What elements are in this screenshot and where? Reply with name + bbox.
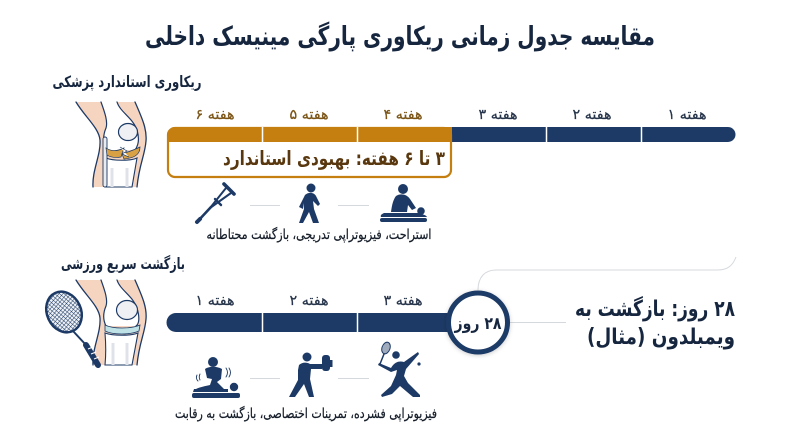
callout box: 3 to 6 weeks: ۳ تا ۶ هفته: بهبودی استاندارد	[223, 147, 445, 170]
illustration: knee with torn meniscus	[76, 102, 146, 187]
text: 28 days return to Wimbledon	[575, 295, 735, 350]
week labels: هفته ۶	[196, 107, 234, 123]
week labels: هفته ۳	[384, 293, 422, 309]
icon: specialised training	[289, 352, 332, 397]
icon: walking person	[299, 184, 320, 223]
week labels: هفته ۱	[196, 293, 234, 309]
week labels: هفته ۴	[384, 107, 422, 123]
icon: tennis racket	[40, 286, 99, 365]
badge: 28 days: ۲۸ روز	[454, 314, 502, 334]
icon: compression physiotherapy	[192, 357, 240, 398]
heading: standard recovery: ریکاوری استاندارد پزشکی	[52, 73, 202, 92]
timeline: fast return bar	[166, 293, 455, 332]
illustration: knee with tennis racket	[40, 280, 146, 365]
text: 28 days return to Wimbledon: ۲۸ روز: بازگشت به	[575, 295, 735, 322]
callout box: 3 to 6 weeks	[167, 127, 452, 177]
text: 28 days return to Wimbledon: ویمبلدون (مثال)	[587, 325, 735, 350]
icon: massage therapy	[380, 184, 427, 222]
week labels: هفته ۳	[478, 107, 518, 123]
bar: navy weeks 1-3	[440, 127, 736, 142]
week labels: هفته ۱	[668, 107, 706, 123]
title: مقایسه جدول زمانی ریکاوری پارگی مینیسک داخلی	[145, 21, 655, 52]
caption: standard recovery steps: استراحت، فیزیوتراپی تدریجی، بازگشت محتاطانه	[206, 226, 432, 243]
week labels: هفته ۵	[290, 107, 328, 123]
week labels: هفته ۲	[572, 107, 612, 123]
timeline: standard six weeks	[167, 107, 736, 177]
week labels	[196, 107, 707, 123]
icon: crutch	[197, 184, 234, 222]
badge: 28 days	[448, 293, 508, 352]
week labels	[196, 293, 422, 309]
heading: fast return: بازگشت سریع ورزشی	[61, 254, 185, 273]
connector line	[478, 257, 736, 322]
icon: tennis player	[378, 341, 421, 397]
caption: fast return steps: فیزیوتراپی فشرده، تمرینات اختصاصی، بازگشت به رقابت	[175, 405, 437, 422]
week labels: هفته ۲	[290, 293, 328, 309]
